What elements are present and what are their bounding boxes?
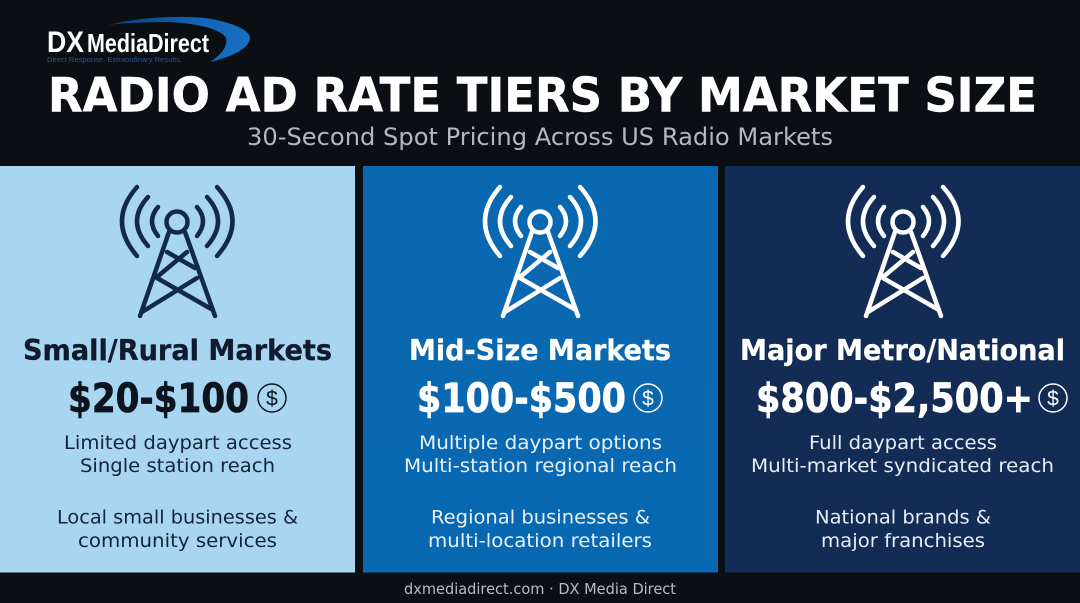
logo (47, 17, 250, 64)
features text: Single station reach (80, 455, 275, 477)
audience text: Local small businesses & (57, 506, 298, 528)
features text: Multi-market syndicated reach (751, 455, 1054, 477)
panel: major metro/national (725, 166, 1080, 572)
features text (64, 432, 292, 477)
logo wordmark DX: DX (47, 26, 84, 59)
price: $100-$500 (417, 374, 626, 422)
audience text (57, 506, 298, 552)
icon: dollar coin (634, 384, 662, 412)
icon: dollar coin (1039, 384, 1067, 412)
icon: dollar coin: $ (1047, 388, 1059, 410)
footer: dxmediadirect.com · DX Media Direct (404, 580, 676, 598)
panel: small/rural markets (0, 166, 355, 572)
logo tagline: Direct Response. Extraordinary Results. (47, 55, 182, 64)
icon: radio tower (848, 187, 958, 316)
features text: Multiple daypart options (419, 432, 662, 454)
audience text: National brands & (815, 506, 991, 528)
icon: dollar coin (258, 384, 286, 412)
features text (751, 432, 1054, 477)
icon: radio tower (485, 187, 596, 316)
features text: Multi-station regional reach (404, 455, 677, 477)
heading: Small/Rural Markets (23, 334, 332, 367)
audience text (428, 506, 652, 552)
audience text: major franchises (821, 530, 985, 552)
features text: Limited daypart access (64, 432, 292, 454)
icon: dollar coin: $ (266, 388, 278, 410)
title: RADIO AD RATE TIERS BY MARKET SIZE (48, 68, 1037, 124)
logo swoosh (108, 17, 250, 62)
price: $800-$2,500+ (756, 374, 1033, 422)
audience text: multi-location retailers (428, 530, 652, 552)
icon: dollar coin: $ (642, 388, 654, 410)
features text (404, 432, 677, 477)
price: $20-$100 (68, 374, 249, 422)
panel: mid-size markets (363, 166, 718, 572)
subtitle: 30-Second Spot Pricing Across US Radio Markets (247, 123, 833, 151)
icon: radio tower (122, 187, 232, 316)
logo wordmark MediaDirect: MediaDirect (87, 28, 209, 58)
features text: Full daypart access (809, 432, 997, 454)
audience text: Regional businesses & (431, 506, 650, 528)
audience text: community services (78, 530, 277, 552)
audience text (815, 506, 991, 552)
heading: Major Metro/National (740, 334, 1065, 367)
heading: Mid-Size Markets (409, 334, 671, 367)
